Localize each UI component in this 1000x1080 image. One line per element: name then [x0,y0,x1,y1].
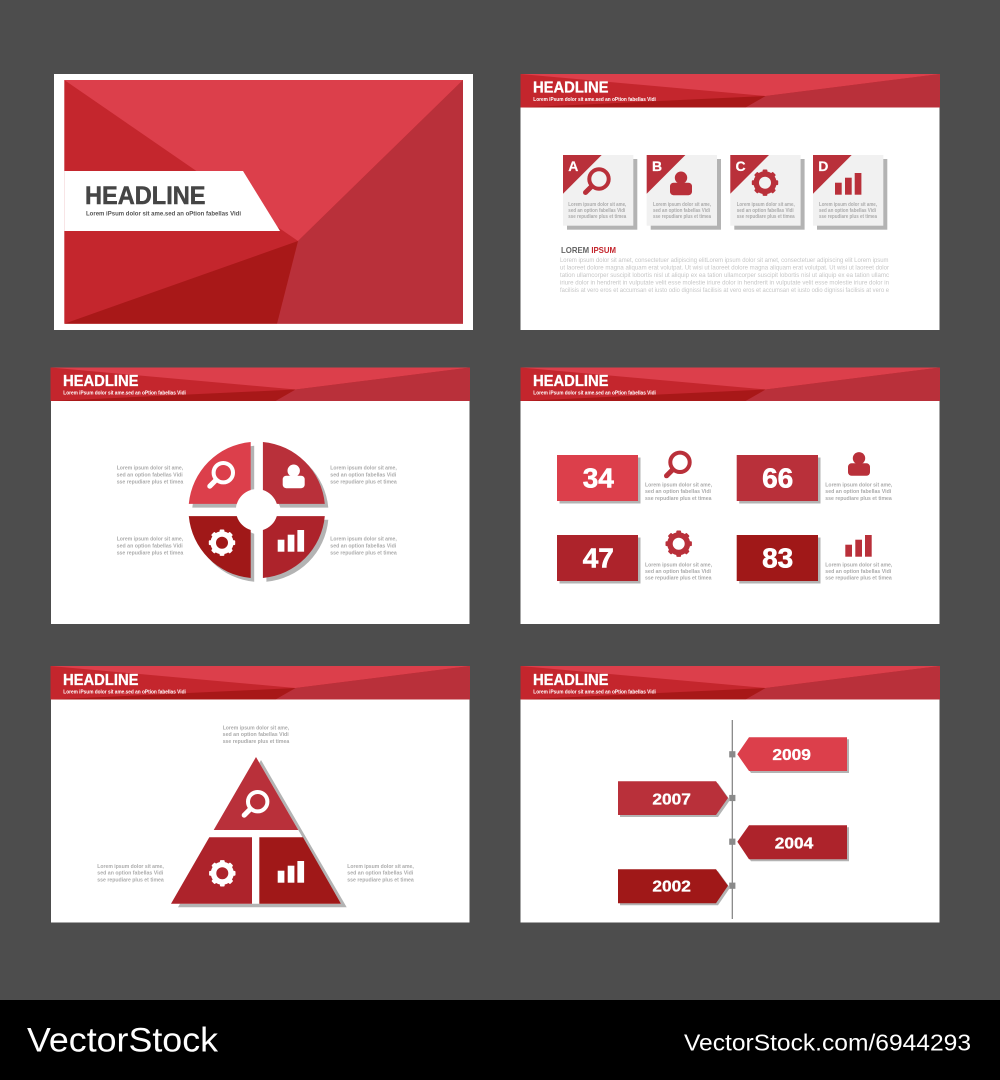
text: lower left: sed an option fabellas Vidi [117,543,183,549]
panel: numbers slide [520,368,940,624]
header band [50,368,470,401]
body paragraph: facilisis at vero eros et accumsan et iusto odio dignissi facilisis at vero eros et accumsan et iusto odio dignissi facilisis at vero e [560,287,889,294]
stat 83: Lorem ipsum dolor sit ame, [825,562,893,568]
text: right: sse repudiare plus et timea [347,878,414,884]
header band: Lorem iPsum dolor sit ame.sed an oPtion fabellas Vidi [63,390,186,396]
stat 83: 83 [762,543,793,574]
card D [813,155,887,230]
header band: HEADLINE [533,80,608,96]
text: upper right: Lorem ipsum dolor sit ame, [330,466,397,472]
card B [647,155,721,230]
body heading: LOREM IPSUM [561,245,616,255]
card C [730,155,805,230]
body paragraph [560,257,889,294]
pyramid right: bars [259,837,341,904]
card B: B [652,158,662,174]
card D: sse repudiare plus et timea [819,214,877,220]
footer bar [0,1000,1000,1080]
stat 34 [557,453,713,504]
tag 2002: 2002 [652,879,691,896]
text: lower right: sed an option fabellas Vidi [330,543,397,549]
timeline axis [729,720,735,919]
stat 47 [557,530,713,584]
stat 34: sse repudiare plus et timea [645,496,712,502]
text: left: sed an option fabellas Vidi [97,871,164,877]
card B: Lorem ipsum dolor sit ame, [653,202,711,208]
panel: quarter circle slide [50,368,470,624]
tag 2004 [737,825,849,861]
body paragraph: Lorem ipsum dolor sit amet, consectetuer adipiscing elitLorem ipsum dolor sit amet, consectetuer adipiscing elit Lorem ipsum [560,257,888,264]
card D: Lorem ipsum dolor sit ame, [819,202,877,208]
text: top: sed an option fabellas Vidi [223,732,289,738]
card C: sed an option fabellas Vidi [737,208,794,214]
text: left: sse repudiare plus et timea [97,878,164,884]
tag 2007: 2007 [652,792,691,809]
card D: sed an option fabellas Vidi [819,208,876,214]
footer url: VectorStock.com/6944293 [684,1030,971,1056]
header band: HEADLINE [533,373,608,390]
text: top [223,725,290,745]
quadrant: bars [263,516,325,578]
stat 83: sed an option fabellas Vidi [825,569,892,575]
text: lower left [117,537,184,556]
header band [520,74,940,108]
body paragraph: tation ullamcorper suscipit lobortis nisl ut aliquip ex ea tation ullamcorper suscipit lobortis nisl ut aliquip ex ea tation ullamc [560,272,889,279]
stat 66: sse repudiare plus et timea [825,496,892,502]
text: top: sse repudiare plus et timea [223,739,289,745]
header band [520,368,940,401]
stat 47: sse repudiare plus et timea [645,576,712,582]
card A: sed an option fabellas Vidi [568,208,626,214]
quadrant: person [263,442,325,504]
text: upper left: sed an option fabellas Vidi [117,472,183,478]
card A [563,155,637,230]
text: lower right: Lorem ipsum dolor sit ame, [330,537,397,543]
stat 66 [737,452,893,504]
text: lower left: sse repudiare plus et timea [117,550,183,556]
stat 34: Lorem ipsum dolor sit ame, [645,483,713,489]
cover headline band: HEADLINE [85,182,206,210]
card A: Lorem ipsum dolor sit ame, [568,202,627,208]
card D: D [818,158,828,174]
quadrant: gear [189,516,251,578]
header band: Lorem iPsum dolor sit ame.sed an oPtion fabellas Vidi [533,390,656,396]
card C: sse repudiare plus et timea [737,214,795,220]
text: right: sed an option fabellas Vidi [347,871,414,877]
header band: Lorem iPsum dolor sit ame.sed an oPtion fabellas Vidi [533,689,656,695]
text: left: Lorem ipsum dolor sit ame, [97,864,164,870]
tag 2009: 2009 [772,747,811,764]
header band: HEADLINE [533,672,608,689]
text: lower left: Lorem ipsum dolor sit ame, [117,537,184,543]
stat 47: Lorem ipsum dolor sit ame, [645,562,713,568]
stat 34: sed an option fabellas Vidi [645,489,712,495]
pyramid top: search [214,757,298,830]
stat 83: sse repudiare plus et timea [825,576,892,582]
pyramid backing [171,757,341,904]
card C: C [736,158,746,174]
cover headline band [64,171,280,231]
footer logo: VectorStock [27,1022,219,1060]
panel: pyramid slide [50,666,470,922]
cover polygon art [64,80,463,324]
quadrant: search [189,442,251,504]
text: right [347,864,414,884]
text: upper left: sse repudiare plus et timea [117,479,183,485]
pyramid left: gear [171,837,252,904]
text: right: Lorem ipsum dolor sit ame, [347,864,414,870]
card B: sse repudiare plus et timea [653,214,711,220]
card A: sse repudiare plus et timea [568,214,626,220]
panel: timeline slide [520,666,940,922]
stat 66: sed an option fabellas Vidi [825,489,892,495]
text: upper right: sse repudiare plus et timea [330,479,397,485]
stat 83 [737,535,893,584]
text: lower right: sse repudiare plus et timea [330,550,397,556]
quadrant shadows [192,446,328,582]
header band [520,666,940,700]
header band: HEADLINE [63,373,138,390]
text: upper left: Lorem ipsum dolor sit ame, [117,466,184,472]
tag 2004: 2004 [775,835,813,852]
text: lower right [330,537,397,556]
text: top: Lorem ipsum dolor sit ame, [223,725,290,731]
header band [50,666,470,700]
panel: cover slide [54,74,473,330]
header band: Lorem iPsum dolor sit ame.sed an oPtion fabellas Vidi [63,689,186,695]
stat 66: Lorem ipsum dolor sit ame, [825,483,893,489]
text: upper left [117,466,184,485]
pyramid shadow [178,760,347,907]
body paragraph: iriure dolor in hendrerit in vulputate velit esse molestie iriure dolor in hendrerit in vulputate velit esse molestie iriure dolor in [560,279,889,286]
text: upper right [330,466,397,485]
tag 2002 [618,869,730,905]
stat 66: 66 [762,463,793,494]
panel: cards slide [520,74,940,330]
tag 2007 [618,781,730,817]
header band: HEADLINE [63,672,138,689]
cover headline band: Lorem iPsum dolor sit ame.sed an oPtion fabellas Vidi [86,210,241,217]
tag 2009 [737,737,849,773]
card C: Lorem ipsum dolor sit ame, [737,202,795,208]
text: left [97,864,164,884]
header band: Lorem iPsum dolor sit ame.sed an oPtion fabellas Vidi [533,97,656,103]
body paragraph: ut laoreet dolore magna aliquam erat volutpat. Ut wisi ut laoreet dolore magna aliquam erat volutpat. Ut wisi ut laoreet dolor [560,264,889,271]
stat 34: 34 [583,463,614,494]
stat 47: sed an option fabellas Vidi [645,569,712,575]
stat 47: 47 [583,543,614,574]
card A: A [568,158,578,174]
centre hole [236,489,278,531]
card B: sed an option fabellas Vidi [653,208,710,214]
text: upper right: sed an option fabellas Vidi [330,472,397,478]
